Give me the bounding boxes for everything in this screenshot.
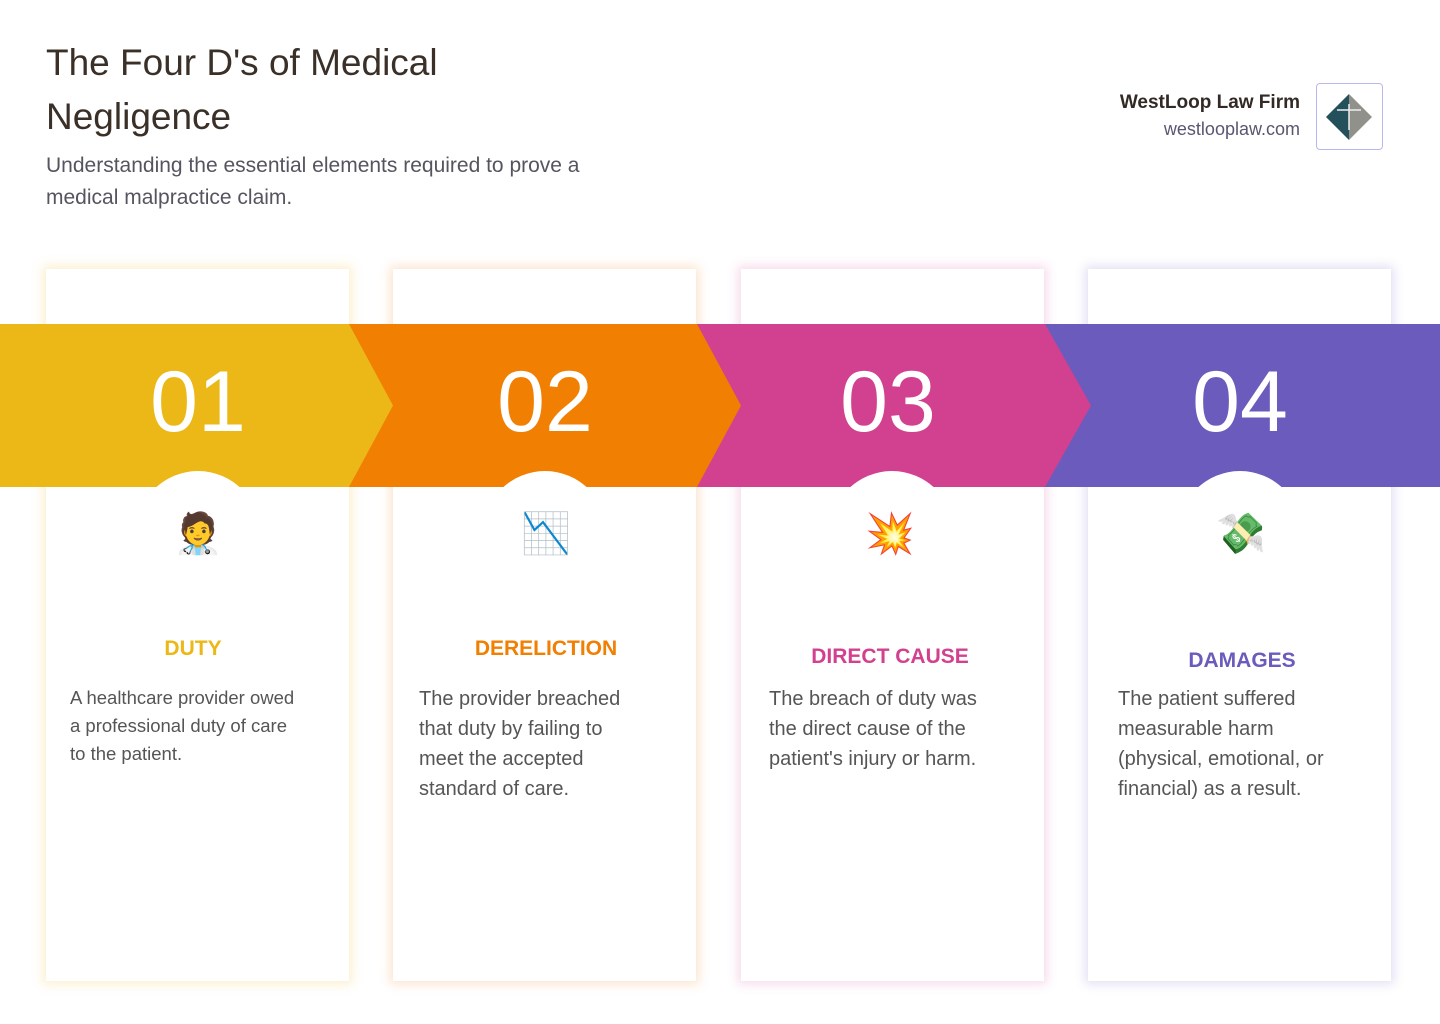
- brand url: westlooplaw.com: [1164, 119, 1300, 139]
- number 04: 04: [1192, 354, 1288, 450]
- title: Negligence: [46, 96, 231, 137]
- card 1: [46, 269, 349, 981]
- brand name: WestLoop Law Firm: [1120, 92, 1300, 113]
- icon: money wings: 💸: [1216, 512, 1266, 556]
- icon: doctor: 🧑‍⚕️: [173, 512, 223, 556]
- heading: duty: DUTY: [164, 637, 222, 660]
- card 3: [741, 269, 1044, 981]
- title: The Four D's of Medical: [46, 42, 438, 83]
- brand: [1120, 83, 1383, 150]
- card 4: [1088, 269, 1391, 981]
- heading: dereliction: DERELICTION: [475, 637, 617, 660]
- text: dereliction: The provider breached that duty by failing to meet the accepted standard of care.: [419, 688, 620, 800]
- number 03: 03: [840, 354, 936, 450]
- icon: chart down: 📉: [521, 512, 571, 556]
- heading: direct cause: DIRECT CAUSE: [811, 645, 969, 668]
- text: duty: A healthcare provider owed a professional duty of care to the patient.: [70, 687, 294, 764]
- number 02: 02: [497, 354, 593, 450]
- text: direct cause: The breach of duty was the direct cause of the patient's injury or harm.: [769, 688, 977, 770]
- subtitle: Understanding the essential elements required to prove a medical malpractice claim.: [46, 154, 580, 209]
- card 2: [393, 269, 696, 981]
- number 01: 01: [150, 354, 246, 450]
- logo: [1316, 83, 1383, 150]
- heading: damages: DAMAGES: [1188, 649, 1296, 672]
- text: damages: The patient suffered measurable harm (physical, emotional, or financial) as a result.: [1118, 688, 1324, 800]
- title: [46, 42, 438, 137]
- icon: collision: 💥: [865, 512, 915, 556]
- banner arrows: [0, 324, 1440, 487]
